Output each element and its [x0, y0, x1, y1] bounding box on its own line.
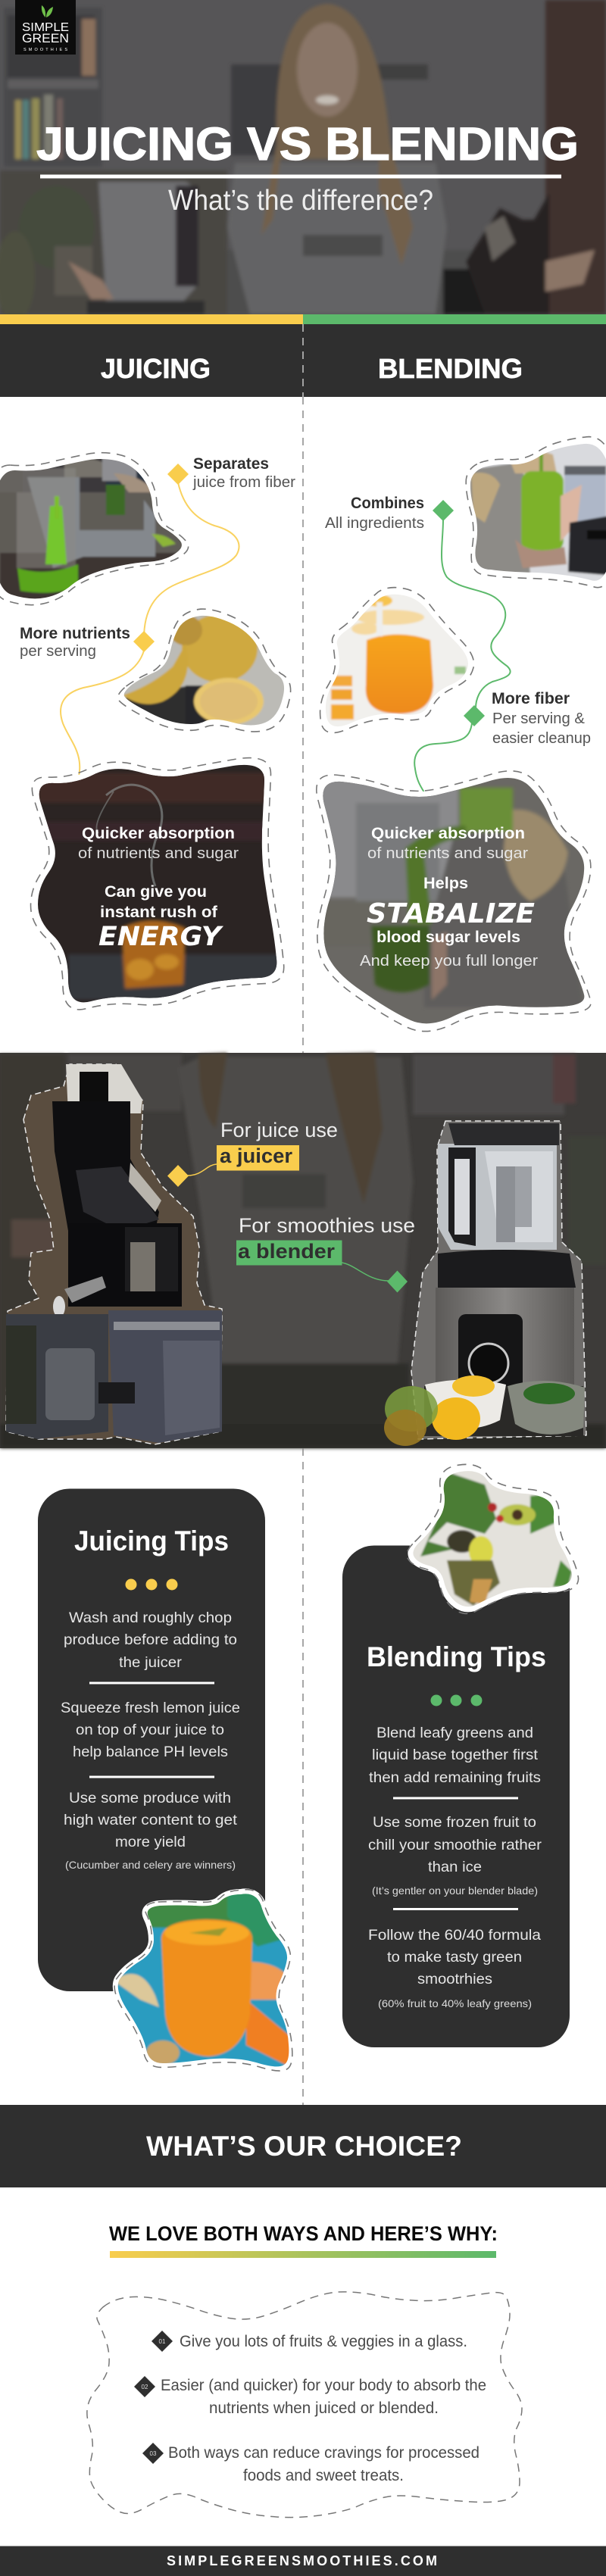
panel: blending tips: than ice: [428, 1859, 482, 1875]
panel: juicing tips: Squeeze fresh lemon juice: [61, 1700, 240, 1716]
text: quicker absorption and energy: Can give you: [105, 883, 207, 901]
panel: reasons list with dashed outline: [87, 2292, 522, 2518]
label: combines all ingredients: All ingredients: [325, 515, 424, 532]
item 03: foods and sweet treats.: [243, 2467, 404, 2484]
photo blob: quicker absorption blending: [314, 769, 595, 1034]
panel: blending tips: Blend leafy greens and: [376, 1725, 533, 1741]
item 02: Easier (and quicker) for your body to absorb the: [161, 2377, 486, 2394]
panel: juicing tips: more yield: [115, 1834, 186, 1850]
panel: juicing tips: Use some produce with: [69, 1790, 231, 1806]
callout: for smoothies use a blender: For smoothies use: [239, 1214, 415, 1237]
juicer cut-out: [6, 1064, 222, 1444]
label: separates juice from fiber: Separates: [193, 455, 269, 473]
text: quicker absorption and stabalize: [360, 825, 538, 970]
item 01: Give you lots of fruits & veggies in a glass.: [180, 2333, 467, 2350]
item 03: [142, 2443, 479, 2484]
text: quicker absorption and energy: instant rush of: [100, 904, 218, 921]
callout: for juice use a juicer: [167, 1119, 338, 1187]
panel: juicing tips: high water content to get: [64, 1812, 238, 1828]
text: quicker absorption and stabalize: Helps: [423, 875, 468, 892]
column headers: [0, 324, 606, 397]
heading band: what's our choice: [0, 2105, 606, 2187]
logo: SMOOTHIES: [23, 48, 67, 52]
diamond: combines: [433, 500, 454, 521]
photo blob: lemons: [114, 609, 295, 735]
item 01: 01: [159, 2338, 166, 2345]
panel: juicing tips: (Cucumber and celery are winners): [65, 1859, 236, 1871]
callout: for juice use a juicer: For juice use: [220, 1119, 338, 1141]
subheading: we love both ways: [109, 2222, 498, 2258]
item 02: 02: [142, 2384, 148, 2390]
text: quicker absorption and energy: Quicker absorption: [82, 825, 235, 842]
text: quicker absorption and energy: ENERGY: [98, 922, 224, 952]
label: more nutrients: More nutrients: [20, 625, 130, 642]
label: combines all ingredients: Combines: [351, 495, 424, 512]
callout: for smoothies use a blender: a blender: [238, 1240, 336, 1263]
callout: for juice use a juicer: a juicer: [220, 1144, 292, 1167]
panel: juicing tips: produce before adding to: [64, 1631, 237, 1648]
label: more fiber: Per serving &: [492, 710, 586, 727]
item 03: 03: [150, 2450, 157, 2457]
text: quicker absorption and stabalize: Quicker absorption: [371, 825, 525, 842]
footer: [0, 2546, 606, 2576]
logo: SIMPLE: [22, 21, 69, 34]
text: quicker absorption and energy: of nutrients and sugar: [78, 845, 239, 862]
photo blob: quicker absorption juicing: [30, 757, 288, 1015]
title: [36, 118, 579, 217]
panel: juicing tips: on top of your juice to: [76, 1722, 224, 1738]
panel: juicing tips: the juicer: [119, 1654, 183, 1671]
text: quicker absorption and energy: [78, 825, 239, 952]
photo blob: greens and avocado: [405, 1464, 579, 1613]
panel: blending tips: chill your smoothie rather: [368, 1837, 542, 1853]
text: quicker absorption and stabalize: of nutrients and sugar: [367, 845, 528, 862]
label: more fiber: [492, 690, 591, 747]
label: more nutrients: per serving: [20, 643, 96, 660]
panel: juicing tips: help balance PH levels: [73, 1744, 228, 1760]
label: separates juice from fiber: [192, 455, 295, 491]
heading band: what's our choice: WHAT’S OUR CHOICE?: [146, 2131, 462, 2162]
equipment panel background: woman at counter: [0, 1053, 606, 1448]
connector: blending green line: [414, 520, 511, 792]
panel: blending tips: Follow the 60/40 formula: [368, 1927, 541, 1944]
heading: juicing tips: Juicing Tips: [74, 1525, 229, 1557]
title: What’s the difference?: [168, 185, 433, 217]
panel: blending tips: liquid base together first: [372, 1747, 539, 1763]
title: JUICING VS BLENDING: [36, 118, 579, 170]
label: more fiber: More fiber: [492, 690, 570, 707]
panel: juicing tips: Wash and roughly chop: [69, 1610, 232, 1626]
hero photo: woman in kitchen: [0, 0, 606, 322]
panel: blending tips: Use some frozen fruit to: [373, 1814, 536, 1831]
panel: blending tips: (60% fruit to 40% leafy greens): [378, 1997, 532, 2009]
logo: GREEN: [22, 31, 69, 45]
photo blob: carrot juice: [110, 1890, 295, 2072]
panel: juicing tips: [38, 1489, 265, 1991]
text: quicker absorption and stabalize: blood sugar levels: [376, 929, 520, 946]
panel: blending tips: (It’s gentler on your blender blade): [372, 1884, 538, 1897]
subheading: we love both ways: WE LOVE BOTH WAYS AND HERE’S WHY:: [109, 2222, 498, 2245]
item 02: [134, 2376, 486, 2417]
label: more fiber: easier cleanup: [492, 730, 591, 747]
connector: juicing yellow line: [61, 482, 239, 780]
diamond: more fiber: [464, 705, 485, 726]
logo: [15, 0, 76, 55]
heading: blending tips: Blending Tips: [367, 1641, 546, 1672]
panel: blending tips: smootrhies: [417, 1971, 492, 1987]
diamond: separates: [167, 464, 189, 485]
blender cut-out: [384, 1121, 586, 1446]
footer: SIMPLEGREENSMOOTHIES.COM: [167, 2553, 437, 2568]
label: combines all ingredients: [325, 495, 424, 532]
column headers: JUICING: [101, 353, 211, 384]
panel: blending tips: [342, 1545, 570, 2047]
label: separates juice from fiber: juice from fiber: [192, 474, 295, 491]
column headers: BLENDING: [378, 353, 523, 384]
colour bars: [0, 314, 606, 324]
photo blob: juicer with green juice: [0, 453, 189, 606]
callout: for smoothies use a blender: [236, 1214, 415, 1292]
text: quicker absorption and stabalize: And keep you full longer: [360, 953, 538, 970]
item 02: nutrients when juiced or blended.: [209, 2400, 439, 2417]
text: quicker absorption and stabalize: STABALIZE: [367, 898, 535, 929]
panel: blending tips: then add remaining fruits: [369, 1769, 541, 1786]
photo blob: green smoothie jar: [462, 437, 606, 591]
label: more nutrients: [20, 625, 130, 660]
item 03: Both ways can reduce cravings for processed: [168, 2444, 479, 2462]
panel: blending tips: to make tasty green: [387, 1949, 522, 1966]
photo blob: orange smoothie: [318, 588, 477, 735]
diamond: more nutrients: [133, 631, 155, 652]
